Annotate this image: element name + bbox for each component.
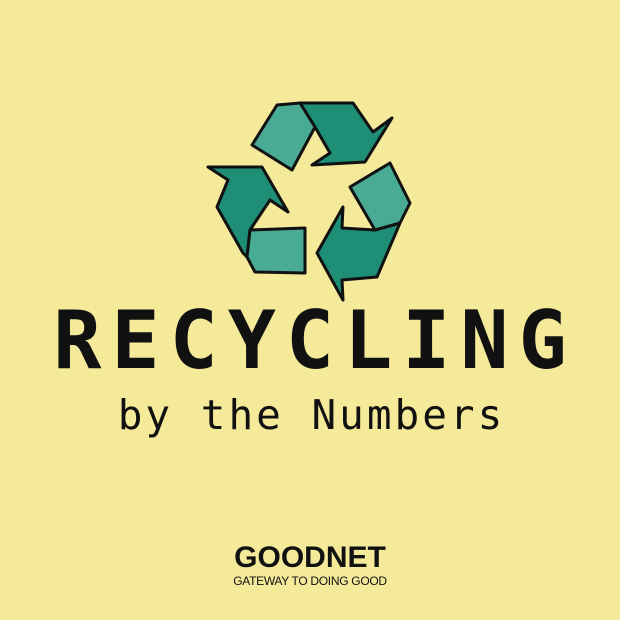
logo tagline: GATEWAY TO DOING GOOD: [233, 574, 387, 588]
subtitle: by the Numbers: [118, 391, 505, 439]
logo: GOODNET: GOODNET: [234, 541, 386, 574]
title: RECYCLING: [53, 294, 577, 387]
